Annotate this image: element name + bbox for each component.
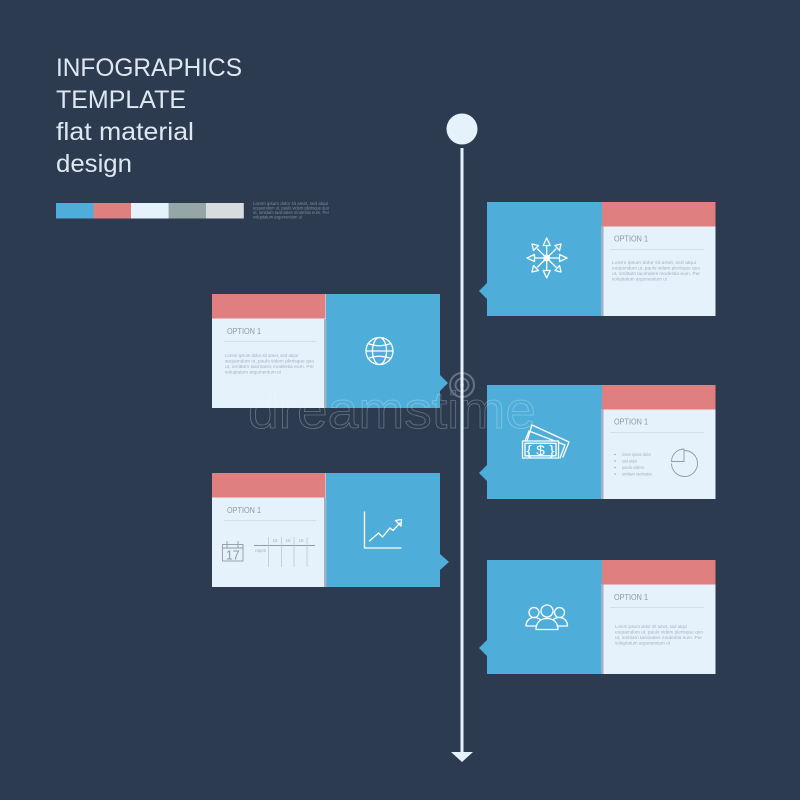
palette description text: voluptatum argumentum ut bbox=[253, 214, 303, 220]
title: design bbox=[56, 150, 132, 178]
mini table: 15 bbox=[285, 538, 291, 543]
icon: group of people bbox=[526, 605, 568, 630]
title: flat material bbox=[56, 118, 194, 146]
bullet list bbox=[614, 452, 653, 476]
card 2 body text: ut, omittam tacimates modestia eum. Per bbox=[225, 364, 315, 369]
icon: globe bbox=[366, 338, 393, 364]
title: INFOGRAPHICS bbox=[56, 54, 242, 82]
bullet list: lorem ipsum dolor bbox=[622, 452, 651, 457]
title: TEMPLATE bbox=[56, 86, 186, 114]
title bbox=[56, 54, 242, 178]
icon: arrows spreading outward bbox=[527, 238, 567, 278]
icon: growth chart bbox=[364, 512, 402, 548]
card 1 body text: voluptatum argumentum ut bbox=[612, 276, 668, 282]
palette description text: ut, omittam tacimates modestia eum. Per bbox=[253, 210, 330, 215]
card 2 body text: sequendum ut, paulo videm plerisque quo bbox=[225, 358, 314, 364]
palette description text: eoquendum ut, paulo videm plerisque quo bbox=[253, 206, 330, 210]
card 2 body text: Lorem ipsum dolor sit amet, sed atqui bbox=[225, 353, 298, 358]
panel: card 3 left: OPTION 1 bbox=[227, 505, 261, 515]
timeline line bbox=[460, 148, 464, 752]
watermark: dreamstime bbox=[248, 382, 536, 440]
bullet list: sed atqui bbox=[622, 458, 637, 464]
card 1 body text: ut, omittam tacimates modestia eum. Per bbox=[612, 271, 700, 276]
mini table: ropes bbox=[255, 548, 267, 553]
icon: banknotes bbox=[522, 425, 569, 458]
card 2 body text bbox=[225, 353, 315, 374]
card 5 body text: Lorem ipsum dolor sit amet, sed atqui bbox=[615, 624, 687, 629]
panel: card 2 left bbox=[212, 294, 448, 408]
panel: card 5 right: OPTION 1 bbox=[614, 592, 648, 602]
card 2 body text: voluptatum argumentum ut bbox=[225, 370, 282, 374]
card 5 body text: ut, omittam tacimates modestia eum. Per bbox=[615, 635, 702, 640]
panel: card 1 right: OPTION 1 bbox=[614, 234, 648, 244]
mini table: 15 bbox=[298, 538, 304, 543]
timeline arrowhead bbox=[451, 752, 473, 762]
card 1 body text: Lorem ipsum dolor sit amet, sed atqui bbox=[612, 260, 696, 265]
icon: banknotes: { $ } bbox=[526, 442, 555, 458]
colour palette bbox=[56, 203, 244, 218]
icon: calendar bbox=[222, 541, 243, 562]
icon: calendar: 17 bbox=[226, 548, 240, 562]
panel: card 1 right bbox=[479, 202, 716, 316]
bullet list: paulo videm bbox=[622, 465, 644, 470]
icon: pie chart bbox=[672, 449, 698, 476]
panel: card 4 right bbox=[479, 385, 716, 499]
card 5 body text bbox=[615, 624, 703, 646]
card 1 body text: eoquendum ut, paulo videm plerisque quo bbox=[612, 266, 700, 270]
panel: card 4 right: OPTION 1 bbox=[614, 416, 648, 426]
card 1 body text bbox=[612, 260, 700, 282]
card 5 body text: eoquendum ut, paulo videm plerisque quo bbox=[615, 630, 703, 634]
panel: card 2 left: OPTION 1 bbox=[227, 326, 261, 336]
bullet list: omittam tacimates bbox=[622, 472, 653, 476]
palette description text: Lorem ipsum dolor sit amet, sed atqui bbox=[253, 201, 328, 206]
mini table bbox=[254, 537, 315, 567]
timeline start circle bbox=[446, 114, 478, 144]
mini table: 15 bbox=[272, 538, 278, 543]
panel: card 3 left bbox=[212, 473, 449, 587]
panel: card 5 right bbox=[479, 560, 716, 674]
palette description text bbox=[253, 201, 330, 220]
card 5 body text: voluptatum argumentum ut bbox=[615, 640, 671, 646]
